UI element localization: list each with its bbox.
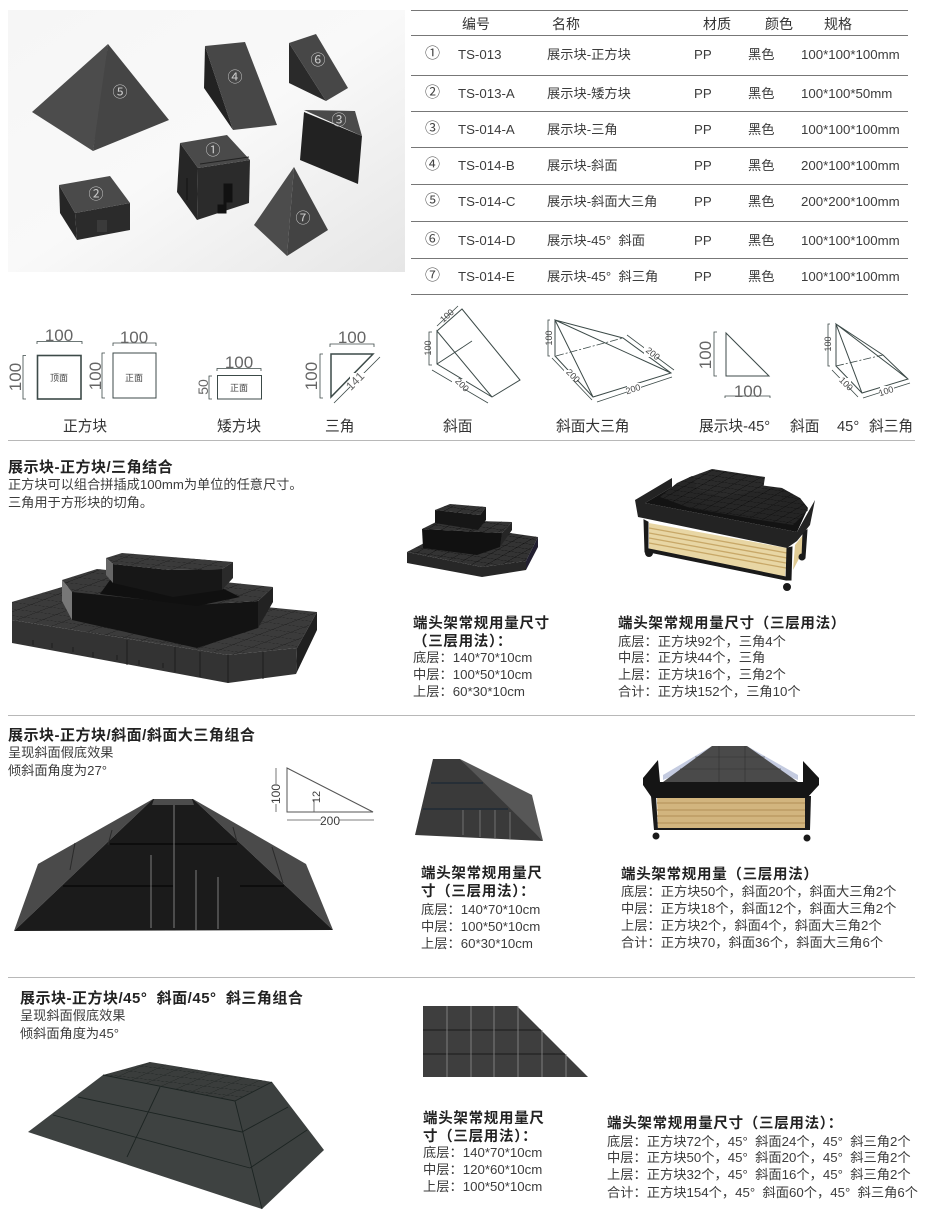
block 4 slope [204,42,277,130]
section 2 slope angle diagram [269,768,374,828]
label: 45 degree slanted triangle [837,418,913,435]
row 4: 黑色 [748,157,775,173]
label: large slope triangle: 斜面大三角 [556,418,629,435]
row 6: PP [694,233,712,248]
table header [462,16,852,32]
section 1 usage, right: 底层：正方块92个，三角4个 [618,634,786,649]
table header: 规格 [824,16,852,32]
drawing: square block [6,326,156,399]
section 1 heading and description: 正方块可以组合拼插成100mm为单位的任意尺寸。 [8,476,303,492]
section 1 usage, left: 中层：100*50*10cm [413,667,532,682]
block 1 cube [177,135,250,220]
section 2 small slope block [415,759,543,841]
block 2 low cube: ② [88,186,104,203]
row 5: 展示块-斜面大三角 [547,194,657,209]
section 1 usage, left: 端头架常规用量尺寸 [413,614,550,632]
section 1 usage, right: 端头架常规用量尺寸（三层用法） [618,614,846,632]
section 3 heading and description: 呈现斜面假底效果 [20,1008,126,1023]
section 3 heading and description: 倾斜面角度为45° [20,1026,119,1041]
block 6 slope 45 [289,34,348,101]
block 2 low cube [59,176,130,240]
section 1 heading and description: 展示块-正方块/三角结合 [8,458,173,476]
drawing: slope [423,306,520,403]
drawing: triangle: 100 [302,362,321,390]
label: 45 degree slanted triangle: 斜三角 [869,418,913,435]
tray band [643,760,819,798]
label: square block: 正方块 [63,418,107,435]
drawing: 45 degree slanted triangle: 100 [877,384,895,398]
row 1: TS-013 [458,47,501,62]
row 7: TS-014-E [458,269,515,284]
block 1 cube: ① [205,142,221,159]
row 5: PP [694,194,712,209]
row 7: 黑色 [748,268,775,284]
section 1 heading and description: 三角用于方形块的切角。 [8,495,153,510]
row 7: 100*100*100mm [801,269,900,284]
top layer [106,553,233,597]
row 4: 展示块-斜面 [547,158,618,173]
section 1 usage, left [413,614,550,699]
section 3 small slope block, front view [423,1006,588,1077]
row 7: ⑦ [425,267,440,284]
drawing: square block: 100 [120,328,148,347]
row 4 [425,156,900,173]
drawing: square block: 100 [86,362,105,390]
row 4: TS-014-B [458,158,515,173]
row 7: 展示块-45° 斜三角 [547,269,658,284]
label: 45 degree slope [699,418,819,435]
table header: 名称 [552,16,580,32]
table header: 颜色 [765,16,793,32]
block 7 slanted triangle [254,167,328,256]
section 2 usage, left: 底层：140*70*10cm [421,902,540,917]
section 1 display cart [635,469,815,590]
row 2 [425,84,892,101]
section 3 heading and description [20,989,303,1041]
row 6: 展示块-45° 斜面 [547,233,645,248]
section 1 usage, right [618,614,846,699]
row 2: TS-013-A [458,86,515,101]
section 3 usage, left: 底层：140*70*10cm [423,1145,542,1160]
block 3 triangle [300,110,362,184]
cart blocks [663,746,798,782]
row 6 [425,231,900,248]
drawing: large slope triangle: 100 [544,330,554,346]
label: 45 degree slanted triangle: 45° [837,419,859,435]
section 2 usage, left [421,864,543,951]
section 1 usage, left: （三层用法）： [413,632,512,650]
row 6: TS-014-D [458,233,515,248]
row 3: 展示块-三角 [547,122,618,137]
section 1 heading and description [8,458,303,510]
middle layer [62,569,273,648]
photo: seven display blocks [8,10,405,272]
row 7: PP [694,269,712,284]
drawing: low block: 正面 [230,383,248,393]
block 5 large pyramid [32,44,169,151]
row 5: ⑤ [425,192,440,209]
section 3 usage, right: 中层：正方块50个，45° 斜面20个，45° 斜三角2个 [607,1150,911,1165]
section 3 usage, left [423,1109,545,1194]
section 2 slope angle diagram: 100 [269,784,283,804]
bottom layer [12,587,317,683]
block 7 slanted triangle: ⑦ [295,210,311,227]
drawing: square block: 100 [6,363,25,391]
row 2: ② [425,84,440,101]
section 2 usage, left: 上层：60*30*10cm [421,936,533,951]
section 2 display cart [643,746,819,842]
cart wood panel [657,798,806,828]
section 2 heading and description: 倾斜面角度为27° [8,763,107,778]
row 6: ⑥ [425,231,440,248]
drawing: low block: 50 [195,379,211,395]
row 1: ① [425,45,440,62]
row 5: 黑色 [748,193,775,209]
drawing: square block: 顶面 [50,373,68,383]
row 1 [425,45,900,62]
row 1: 展示块-正方块 [547,47,631,62]
row 3: 100*100*100mm [801,122,900,137]
section 2 slope angle diagram: 12 [311,791,323,803]
section 3 usage, right [607,1114,918,1200]
row 2: 展示块-矮方块 [547,86,631,101]
section 1 usage, right: 上层：正方块16个，三角2个 [618,667,786,682]
section 3 usage, right: 上层：正方块32个，45° 斜面16个，45° 斜三角2个 [607,1167,911,1182]
section 1 usage, left: 底层：140*70*10cm [413,650,532,665]
drawing: large slope triangle [544,320,674,402]
row 1: 100*100*100mm [801,47,900,62]
cart frame [644,520,807,590]
row 3 [425,120,900,137]
section 2 usage, right: 中层：正方块18个，斜面12个，斜面大三角2个 [621,901,896,916]
section 2 usage, left: 寸（三层用法）： [421,882,535,900]
drawing: large slope triangle: 200 [624,382,642,396]
section 3 usage, left: 中层：120*60*10cm [423,1162,542,1177]
section 1 usage, left: 上层：60*30*10cm [413,684,525,699]
label: low block: 矮方块 [217,418,261,435]
row 2: 100*100*50mm [801,86,892,101]
label: triangle: 三角 [325,418,354,435]
row 3: PP [694,122,712,137]
drawing: large slope triangle: 200 [564,367,582,385]
drawing: 45 degree slanted triangle: 100 [823,336,833,352]
drawing: triangle [302,328,380,403]
block 5 large pyramid: ⑤ [112,84,128,101]
drawing: slope: 200 [453,376,471,394]
row 5: TS-014-C [458,194,516,209]
section 3 usage, right: 合计：正方块154个，45° 斜面60个，45° 斜三角6个 [607,1185,918,1200]
section 3 usage, left: 寸（三层用法）： [423,1127,537,1145]
drawing: slope: 100 [423,340,433,356]
drawing: 45 degree slope: 100 [696,341,715,369]
drawing: 45 degree slanted triangle [823,324,910,398]
section 3 large trapezoid blocks [28,1062,324,1209]
row 4: PP [694,158,712,173]
section 2 usage, right: 端头架常规用量（三层用法） [621,865,819,883]
drawing: triangle: 141 [343,369,367,393]
section 2 heading and description: 展示块-正方块/斜面/斜面大三角组合 [8,726,255,744]
table header: 编号 [462,16,490,32]
block 4 slope: ④ [227,69,243,86]
section 2 large pyramid blocks [14,799,333,931]
label: 45 degree slope: 斜面 [790,418,819,435]
row 7 [425,267,900,284]
drawing: slope: 100 [438,307,456,325]
section 3 usage, right: 端头架常规用量尺寸（三层用法）： [607,1114,843,1132]
section 2 heading and description: 呈现斜面假底效果 [8,745,114,760]
row 4: ④ [425,156,440,173]
section 3 usage, left: 上层：100*50*10cm [423,1179,542,1194]
section 1 small stacked blocks [407,504,538,577]
block 6 slope 45: ⑥ [310,52,326,69]
row 4: 200*100*100mm [801,158,900,173]
row 5: 200*200*100mm [801,194,900,209]
wood panels [649,523,803,577]
row 3: ③ [425,120,440,137]
section 3 usage, left: 端头架常规用量尺 [423,1109,545,1127]
section 1 large stacked blocks [12,553,317,683]
row 3: TS-014-A [458,122,515,137]
row 6: 100*100*100mm [801,233,900,248]
row 6: 黑色 [748,232,775,248]
section 2 usage, right: 合计：正方块70，斜面36个，斜面大三角6个 [621,935,883,950]
tray [635,478,815,548]
section 2 usage, right: 底层：正方块50个，斜面20个，斜面大三角2个 [621,884,896,899]
section 2 usage, right: 上层：正方块2个，斜面4个，斜面大三角2个 [621,918,882,933]
section 3 usage, right: 底层：正方块72个，45° 斜面24个，45° 斜三角2个 [607,1134,911,1149]
row 1: PP [694,47,712,62]
section 3 heading and description: 展示块-正方块/45° 斜面/45° 斜三角组合 [20,989,303,1007]
drawing: 45 degree slope [696,332,770,401]
row 5 [425,192,900,209]
drawing: square block: 正面 [125,373,143,383]
label: slope: 斜面 [443,418,472,435]
drawing: square block: 100 [45,326,73,345]
row 2: PP [694,86,712,101]
row 1: 黑色 [748,46,775,62]
product specification table [411,10,908,294]
section 1 usage, right: 合计：正方块152个，三角10个 [618,684,801,699]
section 2 usage, right [621,865,896,950]
drawing: large slope triangle: 200 [644,345,662,362]
drawing: 45 degree slanted triangle: 100 [837,375,855,393]
drawing: 45 degree slope: 100 [734,382,762,401]
drawing: low block [195,353,262,399]
row 2: 黑色 [748,85,775,101]
cart frame and wheels [651,796,811,842]
section 2 usage, left: 中层：100*50*10cm [421,919,540,934]
section 2 slope angle diagram: 200 [320,814,340,828]
table header: 材质 [703,16,731,32]
drawing: low block: 100 [225,353,253,372]
drawing: triangle: 100 [338,328,366,347]
block 3 triangle: ③ [331,112,347,129]
row 3: 黑色 [748,121,775,137]
stacked blocks in cart [660,469,808,525]
label: 45 degree slope: 展示块-45° [699,418,770,435]
section 2 usage, left: 端头架常规用量尺 [421,864,543,882]
section 1 usage, right: 中层：正方块44个，三角 [618,650,765,665]
section 2 heading and description [8,726,255,778]
